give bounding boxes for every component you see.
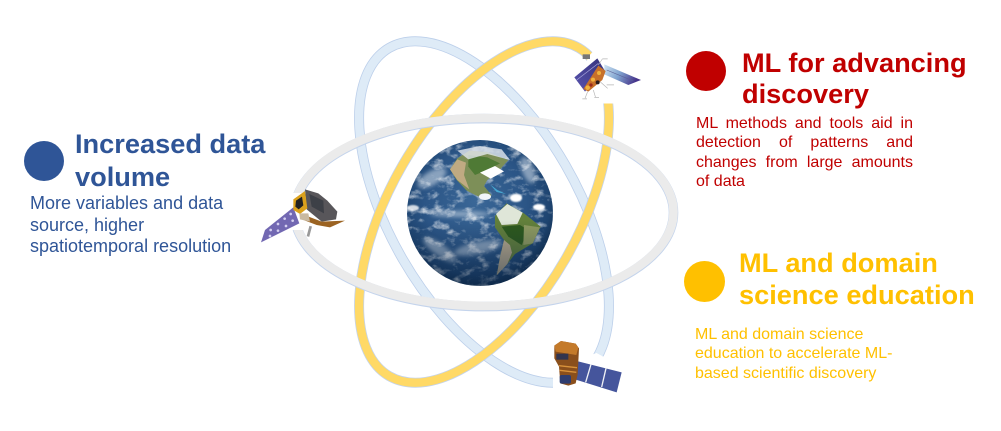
text block	[696, 115, 913, 190]
icon: satellite top right	[574, 54, 641, 99]
heading: ML for advancing	[742, 47, 967, 78]
icon: blue circle	[24, 141, 64, 181]
text block: ML and domain science	[695, 326, 863, 343]
icon: yellow circle	[684, 261, 725, 302]
heading: science education	[739, 278, 975, 310]
panel: increased data volume	[24, 128, 266, 256]
text block	[30, 193, 231, 256]
orbit gaps behind satellites	[284, 47, 628, 396]
Caribbean	[490, 184, 506, 194]
icon: satellite left	[261, 189, 345, 242]
atom diagram: orbits, Earth and satellites	[261, 36, 678, 392]
panel: ML for advancing discovery	[686, 47, 967, 190]
text block: based scientific discovery	[695, 365, 876, 382]
broad cloud bands	[415, 155, 538, 266]
icon: red circle	[686, 51, 726, 91]
panel: ML and domain science education	[684, 246, 975, 382]
icon: satellite bottom right	[554, 341, 622, 392]
South America	[495, 203, 541, 275]
small cumulus	[407, 194, 545, 211]
cloud texture	[405, 138, 555, 288]
orbit: grey ring	[294, 118, 674, 307]
orbit: yellow ring	[308, 1, 660, 423]
icon: Earth	[405, 138, 555, 288]
text block: education to accelerate ML-	[695, 345, 892, 362]
heading	[739, 246, 975, 310]
text block: More variables and data	[30, 193, 223, 213]
heading	[742, 47, 967, 109]
text block: spatiotemporal resolution	[30, 236, 231, 256]
Central America clouds	[479, 193, 491, 200]
text block: ML methods and tools aid in	[696, 115, 913, 132]
text block: changes from large amounts	[696, 154, 913, 171]
heading: volume	[75, 161, 170, 192]
orbit: blue ring	[308, 1, 660, 423]
heading	[75, 128, 266, 192]
heading: ML and domain	[739, 246, 938, 278]
text block: detection of patterns and	[696, 134, 913, 151]
text block: source, higher	[30, 214, 144, 234]
heading: discovery	[742, 78, 869, 109]
heading: Increased data	[75, 128, 265, 159]
North America	[450, 146, 510, 199]
text block	[695, 326, 892, 382]
text block: of data	[696, 173, 745, 190]
